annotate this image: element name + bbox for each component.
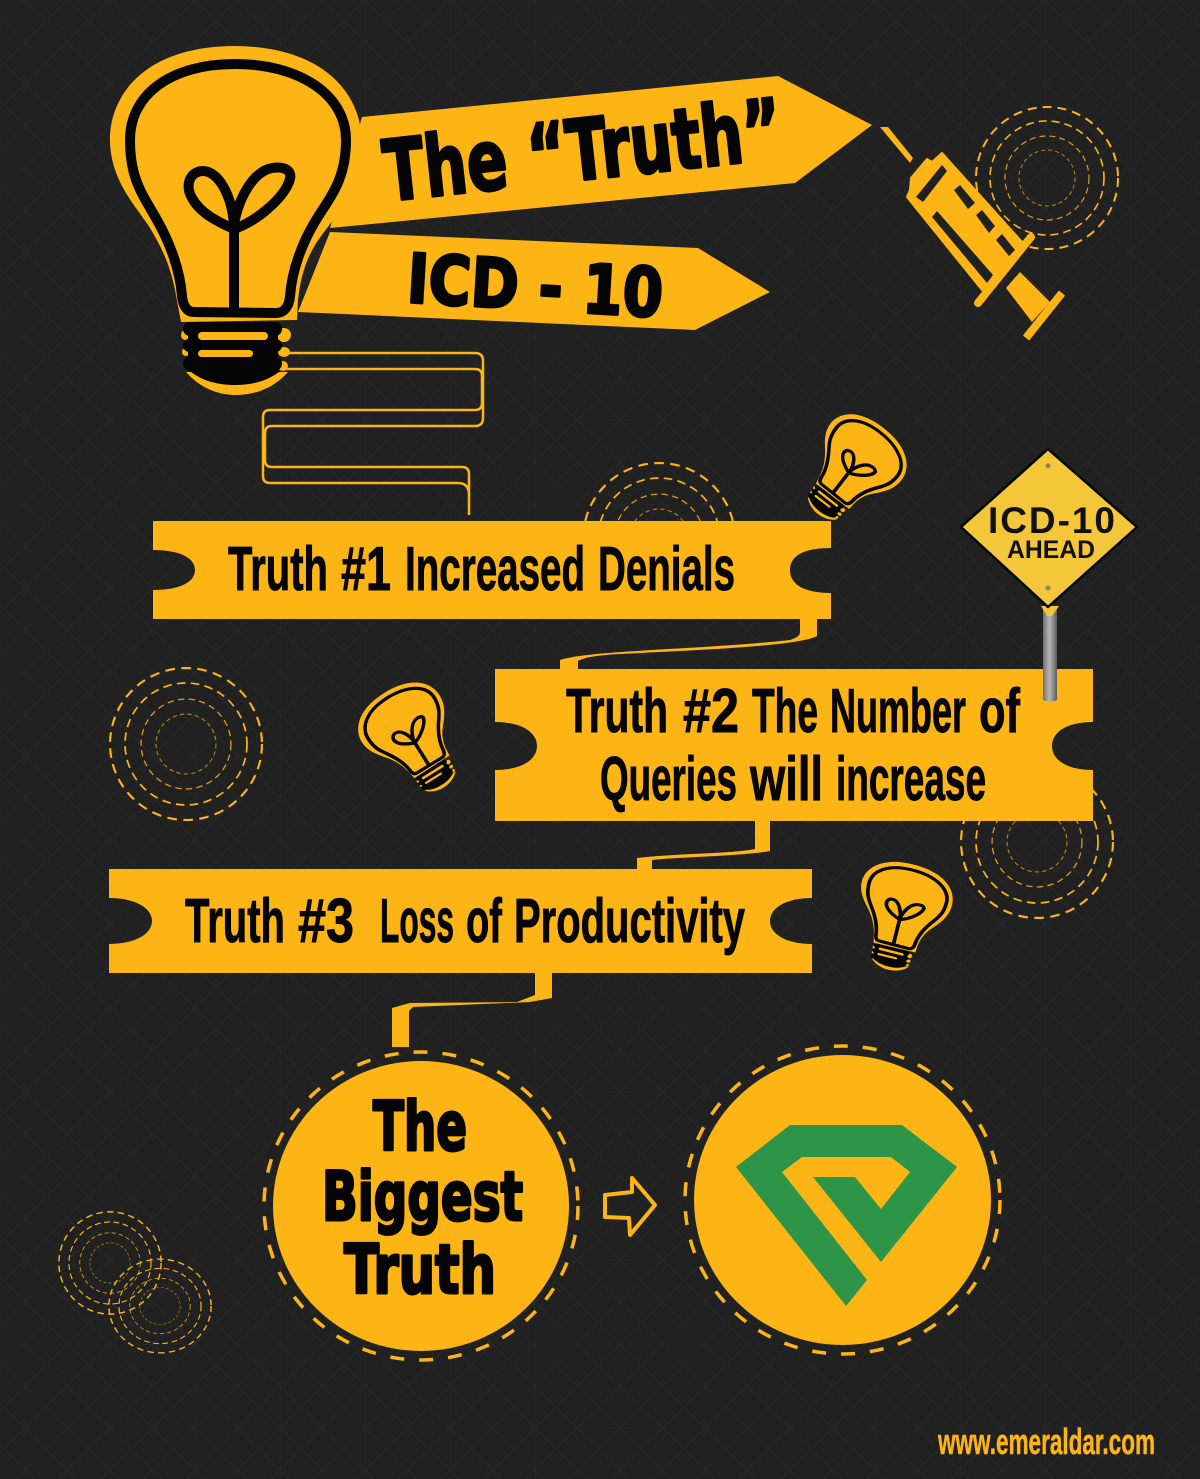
text: truth 3: of [466, 887, 502, 956]
panel: the biggest truth circle [264, 1052, 578, 1360]
text: truth 2: #2 [683, 677, 739, 746]
panel: truth 3 ticket [109, 869, 812, 973]
dashed rings: syringe [976, 107, 1118, 249]
text: truth 2: increase [836, 745, 986, 814]
text: truth 1: Denials [598, 535, 735, 604]
text: The Biggest Truth: Biggest [322, 1158, 523, 1237]
text: truth 1: Truth [228, 535, 328, 604]
text: truth 2: The [752, 677, 818, 746]
text: The Biggest Truth [322, 1088, 523, 1310]
arrow [605, 1178, 655, 1235]
panel: logo circle [685, 1046, 1000, 1354]
panel: truth 2 ticket [495, 669, 1093, 821]
dashed rings: behind truth 2 [961, 766, 1113, 918]
text: truth 3: Productivity [514, 887, 745, 956]
icon: emerald logo [736, 1125, 957, 1306]
road sign: ICD-10 ahead: AHEAD [1007, 536, 1095, 564]
road sign: ICD-10 ahead [961, 449, 1137, 701]
text: The Biggest Truth: Truth [344, 1231, 496, 1310]
text: truth 2: Truth [566, 677, 668, 746]
text: truth 1: #1 [341, 535, 391, 604]
text: truth 3: #3 [298, 887, 354, 956]
text: truth 1: Increased [405, 535, 585, 604]
text: truth 2: will [749, 745, 823, 814]
text: truth 3: Truth [185, 887, 285, 956]
text: truth 2: Queries [600, 745, 737, 814]
icon: small bulb truth 2 [346, 669, 482, 812]
text: truth 3: Loss [380, 887, 454, 956]
text: The Biggest Truth: The [373, 1088, 467, 1167]
dashed rings: left of truth 2 [110, 668, 262, 820]
panel: truth 1 ticket [153, 521, 831, 619]
ribbon line connector from bulb [263, 353, 483, 515]
heading: The Truth: The “Truth” [379, 80, 787, 221]
icon: small bulb truth 1 [782, 401, 920, 542]
icon: large light bulb [110, 46, 362, 395]
dashed rings: bottom left lower [109, 1259, 211, 1353]
icon: syringe [880, 127, 1062, 338]
dashed rings: bottom left upper [59, 1212, 161, 1314]
text: truth 2: Number [830, 677, 966, 746]
icon: small bulb truth 3 [843, 853, 959, 981]
text: truth 2: of [979, 677, 1020, 746]
connector: truth 3 to biggest truth [392, 973, 552, 1047]
dashed rings: behind truth 1 [583, 463, 735, 615]
connector: truth 2 to truth 3 [637, 821, 770, 869]
road sign: ICD-10 ahead: ICD-10 [988, 500, 1115, 541]
connector: truth 1 to truth 2 [560, 619, 817, 669]
banner: ICD-10 [298, 232, 770, 334]
banner: The Truth [330, 76, 872, 228]
heading: ICD - 10: ICD - 10 [405, 240, 665, 334]
